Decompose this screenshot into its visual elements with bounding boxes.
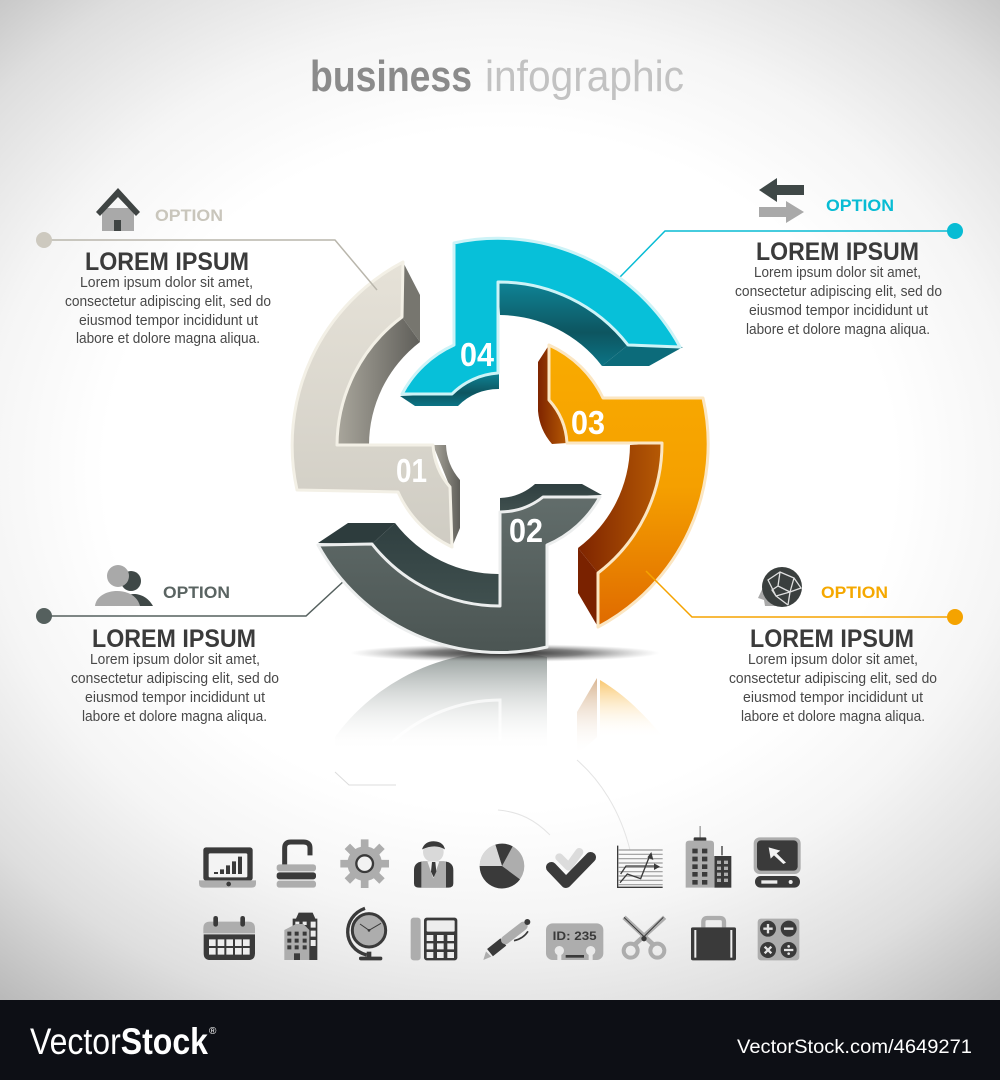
icon: id badge xyxy=(546,923,603,960)
icon: gear xyxy=(340,839,389,888)
icon: scissors xyxy=(624,917,665,958)
icon: computer cursor xyxy=(754,837,801,888)
icon: skyscrapers xyxy=(686,826,731,888)
segment 02: dark grey xyxy=(318,484,602,653)
icon: open padlock xyxy=(277,842,316,888)
icon: people xyxy=(95,565,153,606)
text block 2: LOREM IPSUM xyxy=(92,625,256,653)
icon: check mark xyxy=(551,852,591,883)
icon: globe clock xyxy=(348,908,386,960)
segment 04: blue xyxy=(400,238,683,406)
connector: option 1 xyxy=(36,232,377,290)
segment 01: beige xyxy=(292,262,460,547)
text block 3: labore et dolore magna aliqua. xyxy=(741,709,925,725)
text block 3: eiusmod tempor incididunt ut xyxy=(743,690,923,706)
icon: line chart xyxy=(618,846,663,887)
text block 2: consectetur adipiscing elit, sed do xyxy=(71,671,279,687)
icon: id badge: ID: 235 xyxy=(553,929,597,943)
text block 4: labore et dolore magna aliqua. xyxy=(746,322,930,338)
footer band: VectorStock xyxy=(30,1021,208,1062)
connector: option 2 xyxy=(36,580,345,624)
icon: pie chart xyxy=(480,844,524,888)
text block 2: labore et dolore magna aliqua. xyxy=(82,709,267,725)
option label 3: OPTION xyxy=(821,583,888,602)
text block 1: LOREM IPSUM xyxy=(85,248,249,276)
option label 4: OPTION xyxy=(826,196,894,215)
segment 01: beige: 01 xyxy=(396,452,427,489)
text block 2: Lorem ipsum dolor sit amet, xyxy=(90,652,260,668)
title xyxy=(310,52,684,101)
icon: laptop chart xyxy=(199,847,256,888)
text block 2 xyxy=(71,625,279,725)
icon row: left half xyxy=(199,839,457,960)
text block 4: eiusmod tempor incididunt ut xyxy=(749,303,928,319)
title: infographic xyxy=(485,52,684,101)
icon: phone calculator xyxy=(411,918,457,960)
text block 1: labore et dolore magna aliqua. xyxy=(76,331,260,347)
text block 3: Lorem ipsum dolor sit amet, xyxy=(748,652,918,668)
icon: house xyxy=(96,188,140,231)
segment 04: blue: 04 xyxy=(460,336,495,373)
text block 3: LOREM IPSUM xyxy=(750,625,914,653)
option label 1: OPTION xyxy=(155,206,223,225)
connector: option 4 xyxy=(620,223,963,277)
footer band: ® xyxy=(209,1026,217,1037)
reflection and floor shadow xyxy=(335,644,664,850)
text block 4: Lorem ipsum dolor sit amet, xyxy=(754,265,921,281)
text block 1: Lorem ipsum dolor sit amet, xyxy=(80,275,253,291)
icon: calendar xyxy=(203,916,255,960)
text block 1: eiusmod tempor incididunt ut xyxy=(79,313,258,329)
text block 4: consectetur adipiscing elit, sed do xyxy=(735,284,942,300)
icon row: right half xyxy=(480,826,801,960)
icon: pen xyxy=(483,919,530,960)
text block 3: consectetur adipiscing elit, sed do xyxy=(729,671,937,687)
icon: math buttons xyxy=(758,919,799,960)
icon: businessman xyxy=(414,841,453,888)
text block 2: eiusmod tempor incididunt ut xyxy=(85,690,265,706)
text block 1 xyxy=(65,248,271,347)
icon: office buildings xyxy=(284,913,317,960)
option label 2: OPTION xyxy=(163,583,230,602)
text block 1: consectetur adipiscing elit, sed do xyxy=(65,294,271,310)
icon: head with network xyxy=(758,567,802,607)
footer band xyxy=(0,1000,1000,1080)
segment 02: dark grey: 02 xyxy=(509,512,543,549)
text block 3 xyxy=(729,625,937,725)
icon: briefcase xyxy=(691,918,736,960)
icon: arrows xyxy=(759,178,804,223)
text block 4 xyxy=(735,238,942,338)
segment 03: orange xyxy=(538,345,708,627)
text block 4: LOREM IPSUM xyxy=(756,238,919,266)
title: business xyxy=(310,52,472,101)
segment 03: orange: 03 xyxy=(571,404,605,441)
footer band: VectorStock.com/4649271 xyxy=(737,1037,972,1058)
connector: option 3 xyxy=(646,571,963,625)
